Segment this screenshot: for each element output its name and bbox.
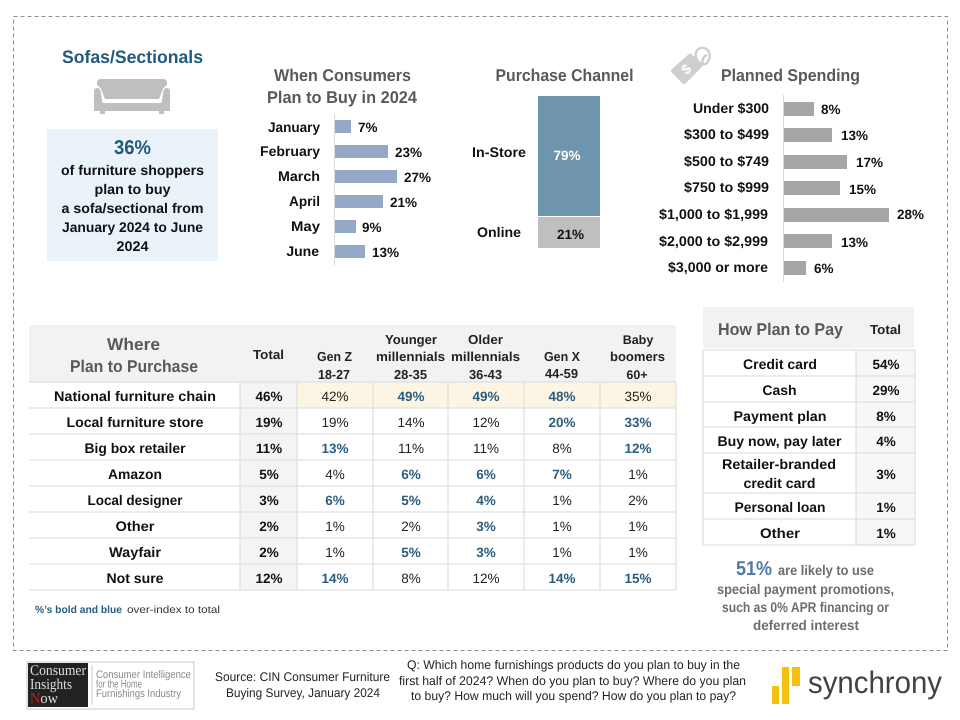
row: not sure: Not sure — [106, 570, 164, 586]
table header: How Plan to Pay — [718, 320, 844, 339]
row: big box retailer: 11% — [398, 441, 424, 456]
row: national furniture chain: 46% — [255, 389, 283, 404]
bar chart: months: 27% — [404, 170, 431, 185]
bar chart: spending ranges: 8% — [821, 102, 841, 117]
table header: 36-43 — [469, 367, 502, 382]
row: other: 3% — [476, 519, 496, 534]
row: not sure — [106, 570, 652, 586]
callout: 36% of furniture shoppers: January 2024 to June — [62, 219, 203, 235]
row: amazon: 4% — [325, 467, 345, 482]
row: wayfair: 1% — [628, 545, 648, 560]
bar chart: months: March — [278, 168, 320, 184]
bar chart: months: May — [291, 218, 320, 234]
source note — [215, 670, 390, 700]
row: cash — [762, 382, 900, 398]
bar chart: months: January — [268, 119, 320, 135]
survey question note: first half of 2024? When do you plan to buy? Where do you plan — [399, 674, 746, 688]
row: other: 1% — [325, 519, 345, 534]
row: credit card — [743, 356, 900, 372]
row: retailer-branded credit card: Retailer-branded — [722, 456, 836, 472]
row: big box retailer: 12% — [624, 441, 652, 456]
callout: 36% of furniture shoppers: 36% — [114, 137, 151, 159]
table: where plan to purchase — [29, 325, 676, 590]
row: cash: 29% — [872, 383, 900, 398]
row: other — [116, 518, 648, 534]
callout: 36% of furniture shoppers: 2024 — [116, 238, 149, 254]
callout: 51% payment promotions: are likely to use — [778, 562, 874, 578]
row: national furniture chain: 49% — [472, 389, 500, 404]
row: national furniture chain: 35% — [624, 389, 652, 404]
table header: 18-27 — [318, 367, 350, 382]
row: not sure: 14% — [321, 571, 349, 586]
row: wayfair: Wayfair — [109, 544, 162, 560]
row: amazon — [108, 466, 648, 482]
row: wayfair — [109, 544, 648, 560]
callout: 51% payment promotions: 51% — [736, 558, 772, 580]
row: other: 1% — [628, 519, 648, 534]
title: Sofas/Sectionals — [62, 47, 203, 67]
panel: planned spending — [659, 48, 924, 282]
bar chart: months: 21% — [390, 195, 417, 210]
row: local designer — [88, 492, 648, 508]
bar chart: months: 9% — [362, 220, 382, 235]
row: local furniture store: 20% — [548, 415, 576, 430]
row: amazon: 6% — [476, 467, 496, 482]
source note: Buying Survey, January 2024 — [226, 686, 380, 700]
heading: Purchase Channel — [496, 66, 634, 85]
heading — [267, 66, 418, 107]
bar chart: spending ranges: $750 to $999 — [684, 179, 769, 195]
callout: 36% of furniture shoppers — [47, 129, 218, 261]
row: big box retailer: 11% — [473, 441, 499, 456]
table header: Baby — [623, 333, 653, 347]
bar chart: months: 13% — [372, 245, 399, 260]
bar chart: spending ranges: $2,000 to $2,999 — [659, 233, 768, 249]
panel: sofas/sectionals summary — [47, 47, 218, 261]
table note: over-index to total — [127, 604, 220, 616]
table header: 60+ — [626, 368, 648, 382]
table header: Plan to Purchase — [70, 357, 198, 376]
row: personal loan: Personal loan — [734, 499, 826, 515]
bar chart: spending ranges: $1,000 to $1,999 — [659, 206, 768, 222]
row: not sure: 8% — [401, 571, 421, 586]
row: other: 1% — [552, 519, 572, 534]
row: other — [760, 525, 896, 541]
row: local furniture store: 19% — [321, 415, 349, 430]
row: local furniture store: 12% — [472, 415, 500, 430]
row: local designer: 6% — [325, 493, 345, 508]
row: local designer: 1% — [552, 493, 572, 508]
bar chart: months: June — [286, 243, 319, 259]
logo: consumer insights now: Insights — [30, 677, 72, 693]
row: buy now, pay later — [718, 433, 896, 449]
row: local furniture store: Local furniture store — [66, 414, 204, 430]
panel: purchase channel — [472, 66, 634, 248]
row: national furniture chain: 49% — [397, 389, 425, 404]
table note — [35, 604, 220, 616]
row: credit card: Credit card — [743, 356, 817, 372]
row: local designer: 3% — [259, 493, 279, 508]
row: other: Other — [116, 518, 155, 534]
bar chart: months: April — [289, 193, 320, 209]
bar chart: spending ranges: 15% — [849, 182, 876, 197]
row: not sure: 14% — [548, 571, 576, 586]
row: local designer: Local designer — [88, 492, 183, 508]
bar chart: spending ranges: 28% — [897, 207, 924, 222]
panel: when consumers plan to buy — [260, 66, 431, 265]
icon: price tag: $ — [678, 60, 694, 78]
bar chart: spending ranges: $300 to $499 — [684, 126, 769, 142]
row: wayfair: 3% — [476, 545, 496, 560]
table header: Older — [468, 332, 503, 347]
row: big box retailer: 11% — [256, 441, 282, 456]
table header: boomers — [610, 349, 665, 364]
row: national furniture chain: National furniture chain — [54, 388, 216, 404]
bar chart: spending ranges: 17% — [856, 155, 883, 170]
table header: 28-35 — [394, 367, 427, 382]
row: national furniture chain: 42% — [321, 389, 349, 404]
row: big box retailer: 8% — [552, 441, 572, 456]
row: big box retailer: 13% — [321, 441, 349, 456]
logo: consumer insights now: Consumer Intelligence — [96, 669, 191, 681]
survey question note: Q: Which home furnishings products do you plan to buy in the — [407, 658, 740, 672]
row: amazon: 5% — [259, 467, 279, 482]
row: local designer: 2% — [628, 493, 648, 508]
row: other: 2% — [259, 519, 279, 534]
icon: price tag — [671, 48, 710, 84]
bar chart: months: 23% — [395, 145, 422, 160]
row: amazon: 6% — [401, 467, 421, 482]
table header — [70, 332, 665, 382]
logo: consumer insights now: for the Home — [96, 678, 142, 690]
row: retailer-branded credit card — [722, 456, 896, 491]
callout: 36% of furniture shoppers: of furniture shoppers — [61, 162, 204, 178]
row: cash: Cash — [762, 382, 797, 398]
row: local furniture store: 33% — [624, 415, 652, 430]
row: amazon: Amazon — [108, 466, 162, 482]
source note: Source: CIN Consumer Furniture — [215, 670, 390, 684]
row: big box retailer — [84, 440, 652, 456]
heading: Plan to Buy in 2024 — [267, 88, 418, 107]
row: payment plan: 8% — [876, 409, 896, 424]
callout: 36% of furniture shoppers: plan to buy — [94, 181, 171, 197]
row: personal loan — [734, 499, 896, 515]
heading: Planned Spending — [721, 66, 860, 85]
icon: sofa — [94, 79, 170, 114]
row: personal loan: 1% — [876, 500, 896, 515]
row: local furniture store: 19% — [255, 415, 283, 430]
table note: %’s bold and blue — [35, 604, 122, 616]
table header: Where — [107, 335, 160, 354]
stacked bar: in-store vs online: 79% — [553, 148, 581, 163]
survey question note: to buy? How much will you spend? How do you plan to pay? — [411, 689, 736, 703]
stacked bar: in-store vs online: Online — [477, 224, 521, 240]
table header: Gen X — [544, 349, 580, 364]
table header: Gen Z — [317, 349, 352, 364]
row: other: Other — [760, 525, 801, 541]
callout: 51% payment promotions — [717, 558, 894, 633]
survey question note — [399, 658, 746, 703]
row: big box retailer: Big box retailer — [84, 440, 186, 456]
row: local furniture store: 14% — [397, 415, 425, 430]
bar chart: months — [260, 114, 431, 265]
logo: synchrony — [772, 665, 942, 704]
heading: When Consumers — [274, 66, 411, 85]
row: wayfair: 5% — [401, 545, 421, 560]
stacked bar: in-store vs online — [472, 96, 600, 248]
table header: millennials — [376, 349, 445, 364]
table header: millennials — [451, 349, 520, 364]
row: other: 1% — [876, 526, 896, 541]
logo: synchrony: synchrony — [808, 665, 942, 700]
logo: consumer insights now — [27, 662, 194, 709]
bar chart: spending ranges: 13% — [841, 235, 868, 250]
bar chart: months: 7% — [358, 120, 378, 135]
bar chart: spending ranges: 6% — [814, 261, 834, 276]
row: wayfair: 1% — [325, 545, 345, 560]
row: not sure: 12% — [472, 571, 500, 586]
bar chart: spending ranges: Under $300 — [693, 100, 769, 116]
row: payment plan: Payment plan — [734, 408, 826, 424]
row: buy now, pay later: 4% — [876, 434, 896, 449]
bar chart: months: February — [260, 143, 320, 159]
stacked bar: in-store vs online: 21% — [557, 227, 584, 242]
logo: consumer insights now: Furnishings Industry — [96, 688, 181, 700]
table header: Total — [253, 347, 284, 362]
callout: 51% payment promotions: such as 0% APR financing or — [722, 599, 889, 615]
row: other: 2% — [401, 519, 421, 534]
bar chart: spending ranges: 13% — [841, 128, 868, 143]
row: retailer-branded credit card: 3% — [876, 467, 896, 482]
row: credit card: 54% — [872, 357, 900, 372]
callout: 51% payment promotions: special payment promotions, — [717, 581, 894, 597]
row: wayfair: 1% — [552, 545, 572, 560]
bar chart: spending ranges: $500 to $749 — [684, 153, 769, 169]
row: wayfair: 2% — [259, 545, 279, 560]
table header: 44-59 — [545, 366, 578, 381]
row: local designer: 5% — [401, 493, 421, 508]
table: how plan to pay — [703, 307, 915, 545]
stacked bar: in-store vs online: In-Store — [472, 144, 526, 160]
row: not sure: 12% — [255, 571, 283, 586]
bar chart: spending ranges — [659, 95, 924, 282]
row: local furniture store — [66, 414, 652, 430]
row: amazon: 7% — [552, 467, 572, 482]
row: amazon: 1% — [628, 467, 648, 482]
logo: consumer insights now: Now — [30, 691, 58, 707]
row: national furniture chain — [54, 388, 652, 404]
row: payment plan — [734, 408, 896, 424]
row: not sure: 15% — [624, 571, 652, 586]
callout: 51% payment promotions: deferred interest — [753, 617, 859, 633]
table header: Younger — [385, 332, 437, 347]
row: national furniture chain: 48% — [548, 389, 576, 404]
bar chart: spending ranges: $3,000 or more — [668, 259, 768, 275]
table header: Total — [870, 322, 901, 337]
row: buy now, pay later: Buy now, pay later — [718, 433, 842, 449]
row: local designer: 4% — [476, 493, 496, 508]
callout: 36% of furniture shoppers: a sofa/sectional from — [62, 200, 204, 216]
logo: consumer insights now: Consumer — [30, 663, 86, 679]
row: retailer-branded credit card: credit card — [744, 475, 816, 491]
